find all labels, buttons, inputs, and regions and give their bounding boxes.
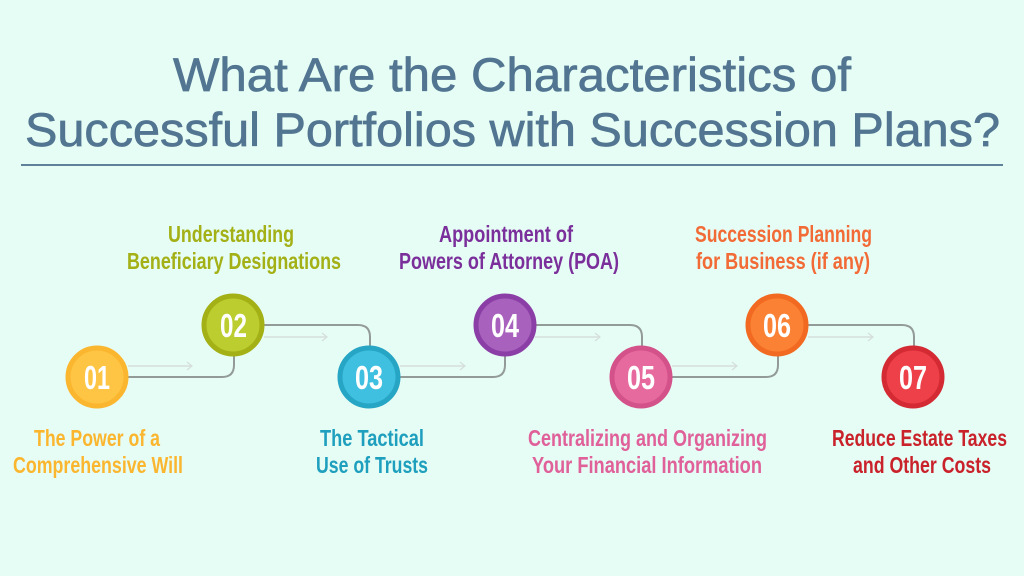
step 04 circle	[476, 296, 534, 354]
connector: 01 to 02	[128, 355, 234, 377]
step 06 circle	[748, 296, 806, 354]
label 01: The Power of a	[34, 425, 160, 451]
label 01	[13, 425, 183, 478]
label 06	[695, 221, 872, 274]
step 07 circle	[884, 348, 942, 406]
label 01: Comprehensive Will	[13, 452, 183, 478]
label 02	[127, 221, 341, 274]
title: What Are the Characteristics of	[173, 48, 852, 101]
label 03: The Tactical	[320, 425, 424, 451]
connector: 05 to 06	[672, 355, 778, 377]
step 01 circle: 01	[84, 359, 110, 396]
label 02: Understanding	[168, 221, 294, 247]
step 05 circle: 05	[627, 359, 655, 396]
title: Successful Portfolios with Succession Plans?	[25, 103, 1000, 156]
step 06 circle: 06	[763, 307, 791, 344]
label 03: Use of Trusts	[316, 452, 428, 478]
label 04: Appointment of	[439, 221, 573, 247]
label 07	[832, 425, 1007, 478]
step 04 circle: 04	[491, 307, 519, 344]
label 02: Beneficiary Designations	[127, 248, 341, 274]
connector: 03 to 04	[400, 355, 505, 377]
step 01 circle	[68, 348, 126, 406]
connector: 04 to 05	[535, 325, 642, 347]
step 03 circle: 03	[355, 359, 383, 396]
label 05	[528, 425, 767, 478]
step 02 circle	[204, 296, 262, 354]
label 03	[316, 425, 428, 478]
label 06: Succession Planning	[695, 221, 872, 247]
label 05: Your Financial Information	[532, 452, 762, 478]
label 04	[399, 221, 619, 274]
step 07 circle: 07	[899, 359, 927, 396]
connector: 02 to 03	[264, 325, 370, 347]
label 04: Powers of Attorney (POA)	[399, 248, 619, 274]
connector: 06 to 07	[808, 325, 914, 347]
label 05: Centralizing and Organizing	[528, 425, 767, 451]
step 03 circle	[340, 348, 398, 406]
title	[25, 48, 1000, 156]
label 06: for Business (if any)	[696, 248, 870, 274]
step 05 circle	[612, 348, 670, 406]
step 02 circle: 02	[220, 307, 247, 344]
